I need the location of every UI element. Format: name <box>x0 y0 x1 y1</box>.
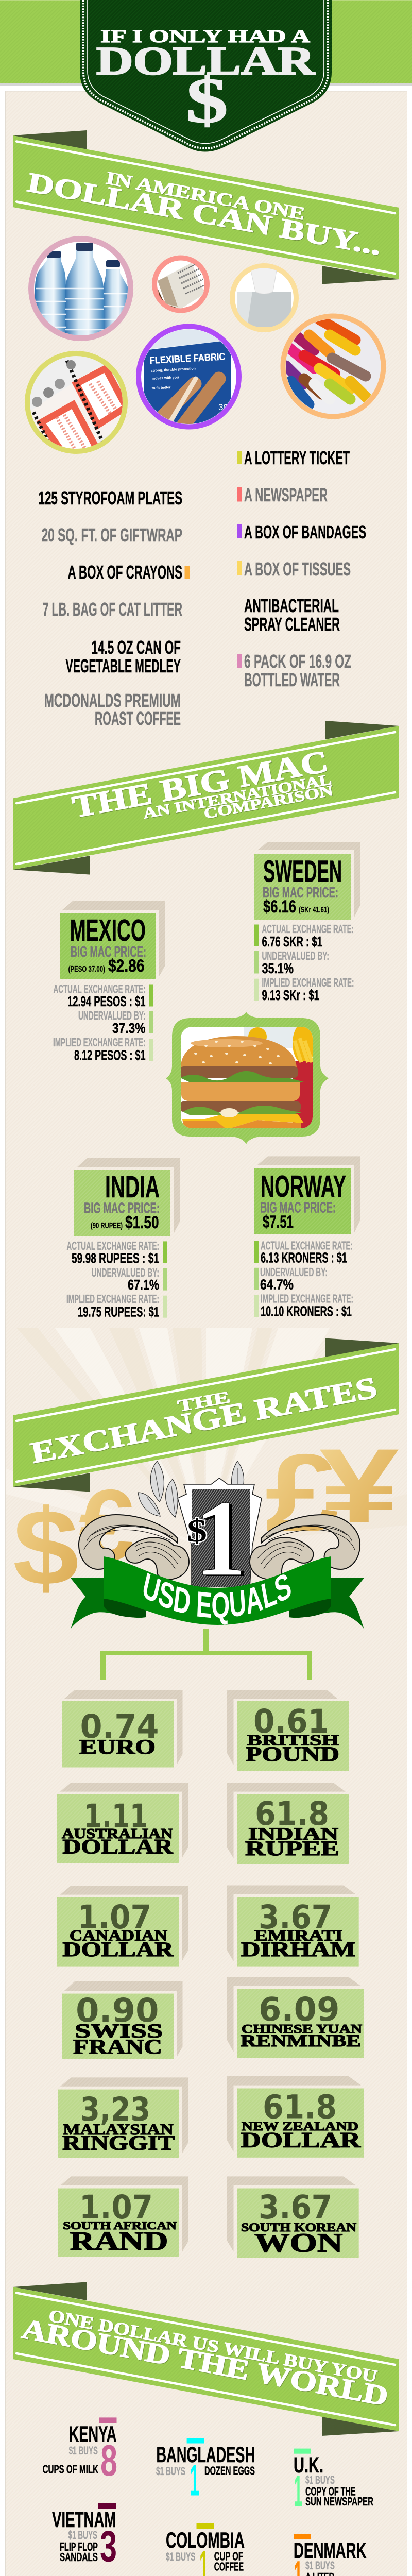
ornament: dollar frame <box>178 1478 262 1587</box>
gold currency symbols: ¥ <box>319 1427 399 1545</box>
card: Norway: NORWAY <box>261 1170 346 1204</box>
item: vegetable medley: VEGETABLE MEDLEY <box>66 655 181 676</box>
rate card: Swiss franc <box>62 1981 182 2059</box>
rate card: Swiss franc: SWISS <box>75 2021 163 2042</box>
stats: India: IMPLIED EXCHANGE RATE: <box>66 1292 159 1306</box>
rate card: South African rand: RAND <box>70 2227 168 2256</box>
title text: DOLLAR <box>96 39 316 83</box>
photo circle: bandages: FLEXIBLE FABRIC <box>149 351 226 366</box>
item: bottled water <box>237 651 351 690</box>
country: Kenya: $1 BUYS <box>69 2444 98 2457</box>
ribbon heading: COMPARISON <box>202 783 334 822</box>
stats: Mexico: IMPLIED EXCHANGE RATE: <box>53 1036 145 1049</box>
rate card: Swiss franc: 0.90 <box>76 1992 159 2029</box>
stats: India: 67.1% <box>128 1277 159 1293</box>
ribbon heading <box>25 166 384 261</box>
rate card: Indian rupee: 61.8 <box>255 1795 329 1833</box>
rate card: Canadian dollar <box>57 1886 188 1967</box>
rate card: Emirati dirham: EMIRATI <box>254 1927 343 1944</box>
rate card: British pound: POUND <box>246 1742 339 1766</box>
country: Bangladesh: 1 <box>190 2456 199 2505</box>
country: Colombia: $1 BUYS <box>166 2550 195 2563</box>
rate card: New Zealand dollar: DOLLAR <box>241 2129 361 2153</box>
country: Vietnam: 3 <box>100 2522 117 2571</box>
country: U.K.: SUN NEWSPAPER <box>305 2495 373 2508</box>
item: newspaper <box>237 484 328 505</box>
connector: tree bracket <box>100 1629 312 1680</box>
rate card: Canadian dollar: 1.07 <box>77 1899 151 1936</box>
country: Bangladesh <box>156 2438 255 2505</box>
ribbon heading: EXCHANGE RATES <box>28 1370 380 1470</box>
rate card: Chinese yuan renminbe: RENMINBE <box>241 2032 361 2050</box>
country: U.K.: COPY OF THE <box>305 2484 356 2498</box>
country: Vietnam: FLIP FLOP <box>60 2540 98 2553</box>
stats: India <box>66 1239 167 1320</box>
stats: Norway: 6.13 KRONERS : $1 <box>261 1250 347 1266</box>
country: Kenya: KENYA <box>69 2422 117 2447</box>
rate card: Australian dollar: 1.11 <box>84 1798 148 1835</box>
rate card: Australian dollar <box>57 1783 188 1863</box>
rate card: South African rand: SOUTH AFRICAN <box>63 2219 177 2232</box>
item: roast coffee: MCDONALDS PREMIUM <box>44 690 181 711</box>
stats: Mexico <box>53 982 153 1063</box>
photo circle: bandages: strong, durable protection <box>151 367 196 373</box>
item: spray cleaner: ANTIBACTERIAL <box>244 595 339 616</box>
photo circle: bandages <box>139 325 239 433</box>
rate card: Canadian dollar: CANADIAN <box>70 1927 167 1944</box>
ornament: numeral one: 1 <box>195 1478 246 1599</box>
country: Bangladesh: $1 BUYS <box>156 2465 185 2478</box>
ribbon heading: DOLLAR CAN BUY... <box>25 166 384 261</box>
ornament: left scroll <box>79 1515 189 1580</box>
rate card: New Zealand dollar <box>227 2076 364 2158</box>
stats: Mexico: 37.3% <box>112 1020 146 1036</box>
item: cat litter: 7 LB. BAG OF CAT LITTER <box>43 599 182 620</box>
rate card: Emirati dirham: DIRHAM <box>241 1938 355 1961</box>
card: India: INDIA <box>105 1170 160 1204</box>
photo circle: tissue box <box>232 266 296 330</box>
list: what a dollar buys, right column <box>237 447 366 690</box>
rate card: Chinese yuan renminbe: CHINESE YUAN <box>242 2023 363 2036</box>
rate card: Malaysian ringgit: MALAYSIAN <box>63 2121 174 2138</box>
stats: Mexico: UNDERVALUED BY: <box>78 1009 145 1022</box>
item: bottled water: BOTTLED WATER <box>244 669 340 690</box>
ornament: dollar sign: $ <box>187 1514 207 1549</box>
rate card: South Korean won <box>227 2176 359 2258</box>
rate card: Australian dollar: DOLLAR <box>62 1835 174 1858</box>
ribbon heading: THE BIG MAC <box>70 744 331 824</box>
card: Sweden: $6.16 <box>263 897 296 917</box>
card: Sweden: SWEDEN <box>263 854 342 888</box>
item: bottled water: 6 PACK OF 16.9 OZ <box>244 651 351 672</box>
rate card: Swiss franc: FRANC <box>73 2035 162 2058</box>
card: India: $1.50 <box>125 1213 159 1232</box>
rate card: Chinese yuan renminbe <box>227 1977 364 2058</box>
country: Denmark: $1 BUYS <box>305 2559 335 2572</box>
rate card: British pound: BRITISH <box>247 1732 339 1749</box>
ornament: numeral one: 1 <box>198 1479 249 1600</box>
card: Sweden <box>254 842 360 1003</box>
country: Denmark: DENMARK <box>294 2538 367 2563</box>
country: U.K.: 1 <box>294 2467 303 2516</box>
gold currency symbols: € <box>79 1469 134 1581</box>
rate card: Indian rupee: INDIAN <box>248 1825 339 1844</box>
rate card: South Korean won: WON <box>254 2229 343 2258</box>
ribbon: the Big Mac <box>13 721 399 875</box>
country: Vietnam: VIETNAM <box>52 2507 116 2532</box>
title text: $ <box>186 65 228 137</box>
rate card: South Korean won: 3.67 <box>259 2189 332 2226</box>
ribbon heading: AROUND THE WORLD <box>20 2313 391 2412</box>
stats: Sweden <box>254 922 354 1003</box>
country: Kenya: 8 <box>100 2436 117 2485</box>
gold currency symbols: $ <box>13 1487 79 1608</box>
stats: Mexico: 8.12 PESOS : $1 <box>74 1047 145 1063</box>
item: roast coffee <box>44 690 181 729</box>
card: Mexico: MEXICO <box>70 913 146 947</box>
ribbon heading: ONE DOLLAR US WILL BUY YOU <box>47 2306 379 2386</box>
list: what a dollar buys, left column <box>38 487 190 729</box>
ribbon heading: IN AMERICA ONE <box>105 168 306 224</box>
stats: Norway: UNDERVALUED BY: <box>260 1265 328 1279</box>
photo circle: bandages: 30 <box>218 402 228 412</box>
stats: India: 19.75 RUPEES: $1 <box>78 1303 159 1320</box>
rate card: South Korean won: SOUTH KOREAN <box>241 2221 356 2234</box>
stats: Mexico: 12.94 PESOS : $1 <box>67 993 145 1009</box>
country: Colombia: CUP OF <box>214 2549 243 2563</box>
card: India <box>66 1158 180 1320</box>
country: Bangladesh: DOZEN EGGS <box>204 2464 255 2477</box>
photo circle: newspaper <box>154 258 207 310</box>
country: Denmark <box>294 2534 367 2576</box>
ribbon heading <box>28 1370 380 1470</box>
rate card: Malaysian ringgit <box>58 2077 188 2158</box>
ribbon: in America one dollar can buy <box>13 130 399 284</box>
country: Colombia: COFFEE <box>214 2560 244 2573</box>
ornament: leaves <box>138 1461 244 1517</box>
card: Norway: $7.51 <box>263 1212 294 1232</box>
stats: India: 59.98 RUPEES : $1 <box>72 1250 159 1266</box>
stats: India: ACTUAL EXCHANGE RATE: <box>67 1239 159 1252</box>
photo circle: water bottles <box>31 239 131 345</box>
rate card: New Zealand dollar: 61.8 <box>263 2089 337 2126</box>
item: lottery ticket <box>237 447 350 468</box>
card: Sweden: (SKr 41.61) <box>299 906 329 914</box>
title text: IF I ONLY HAD A <box>100 26 311 46</box>
item: newspaper: A NEWSPAPER <box>244 484 328 505</box>
item: spray cleaner <box>244 595 340 635</box>
rate card: Malaysian ringgit: 3,23 <box>80 2091 150 2128</box>
item: tissues <box>237 558 351 580</box>
photo circle: lottery tickets <box>27 353 126 459</box>
photo frame: Big Mac burger <box>166 1012 329 1144</box>
rate card: British pound: 0.61 <box>253 1703 329 1740</box>
stats: Sweden: 6.76 SKR : $1 <box>262 934 322 950</box>
item: spray cleaner: SPRAY CLEANER <box>244 614 340 635</box>
ribbon: one dollar around the world <box>13 2282 399 2436</box>
rate card: Canadian dollar: DOLLAR <box>62 1938 174 1961</box>
card: Mexico: (PESO 37.00) <box>68 965 105 974</box>
rate card: New Zealand dollar: NEW ZEALAND <box>242 2120 358 2133</box>
ribbon heading <box>20 2306 391 2412</box>
rate card: euro: EURO <box>79 1735 156 1758</box>
country: Bangladesh: BANGLADESH <box>157 2443 255 2467</box>
item: vegetable medley <box>66 637 181 676</box>
engraved one dollar ornament <box>79 1461 360 1600</box>
stats: Mexico: ACTUAL EXCHANGE RATE: <box>54 982 145 995</box>
title text <box>96 26 316 137</box>
country: U.K.: U.K. <box>294 2453 323 2478</box>
item: crayons: A BOX OF CRAYONS <box>68 562 182 583</box>
stats: Norway: 64.7% <box>260 1277 294 1292</box>
card: Mexico: BIG MAC PRICE: <box>71 944 146 960</box>
stats: India: UNDERVALUED BY: <box>92 1266 159 1279</box>
item: roast coffee: ROAST COFFEE <box>95 708 181 729</box>
rate card: Indian rupee <box>227 1783 349 1864</box>
ornament: hatched center <box>192 1489 250 1587</box>
green banner: USD equals <box>71 1556 364 1629</box>
item: vegetable medley: 14.5 OZ CAN OF <box>92 637 181 658</box>
ribbon: the exchange rates <box>13 1338 399 1492</box>
card: Norway: BIG MAC PRICE: <box>260 1199 336 1216</box>
stats: Norway: 10.10 KRONERS : $1 <box>261 1303 352 1319</box>
rate card: euro: 0.74 <box>80 1708 159 1745</box>
country: Vietnam: $1 BUYS <box>68 2529 97 2541</box>
country: Colombia <box>166 2523 245 2576</box>
photo circle: crayons <box>283 316 383 417</box>
country: Vietnam: SANDALS <box>60 2550 98 2564</box>
country: Colombia: COLOMBIA <box>166 2528 245 2553</box>
country: U.K.: $1 BUYS <box>305 2473 335 2486</box>
country: Kenya <box>43 2417 117 2485</box>
stats: Sweden: 9.13 SKr : $1 <box>262 987 319 1003</box>
rate card: Emirati dirham: 3.67 <box>259 1899 332 1936</box>
card: India: BIG MAC PRICE: <box>84 1200 160 1217</box>
rate card: euro <box>62 1690 182 1767</box>
country: Vietnam <box>52 2503 117 2571</box>
card: Mexico <box>53 901 165 1063</box>
header banner <box>0 0 412 86</box>
card: India: (90 RUPEE) <box>91 1222 123 1230</box>
item: giftwrap: 20 SQ. FT. OF GIFTWRAP <box>42 524 182 546</box>
rate card: Indian rupee: RUPEE <box>245 1837 339 1860</box>
rate card: South African rand <box>58 2176 188 2257</box>
stats: Norway <box>254 1239 353 1319</box>
rate card: Emirati dirham <box>227 1886 359 1967</box>
rate card: Australian dollar: AUSTRALIAN <box>62 1826 173 1841</box>
item: bandages <box>237 521 366 543</box>
rate card: British pound <box>227 1690 349 1771</box>
card: Mexico: $2.86 <box>108 956 144 976</box>
photo circle: bandages: moves with you <box>152 376 179 381</box>
card: Norway <box>254 1156 360 1319</box>
rate card: South African rand: 1.07 <box>79 2189 153 2226</box>
stats: Sweden: UNDERVALUED BY: <box>262 949 329 962</box>
photo circle: bandages: to fit better <box>152 386 171 391</box>
gold currency symbols <box>13 1427 399 1608</box>
ribbon heading: THE <box>176 1387 232 1415</box>
rate card: Malaysian ringgit: RINGGIT <box>62 2131 175 2155</box>
item: styrofoam plates: 125 STYROFOAM PLATES <box>38 487 182 509</box>
item: crayons <box>68 562 190 583</box>
card: Sweden: BIG MAC PRICE: <box>263 885 338 901</box>
stats: Sweden: 35.1% <box>262 960 294 976</box>
gold currency symbols: £ <box>265 1431 339 1555</box>
ribbon heading: AN INTERNATIONAL <box>142 771 333 822</box>
title shield <box>80 0 332 151</box>
country: U.K. <box>294 2449 373 2516</box>
rate card: Chinese yuan renminbe: 6.09 <box>259 1991 340 2028</box>
country: Kenya: CUPS OF MILK <box>43 2463 98 2476</box>
ornament: right scroll <box>250 1515 360 1580</box>
banner text: USD EQUALS <box>143 1572 291 1625</box>
